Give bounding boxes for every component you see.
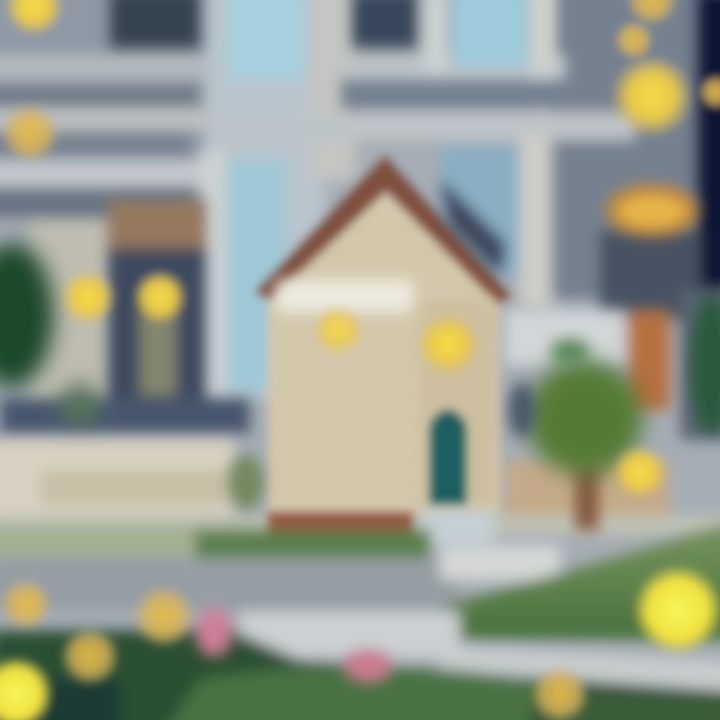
wall brick mottling (275, 230, 450, 490)
wall shading (420, 300, 495, 510)
top windows (110, 0, 554, 78)
house wall (268, 190, 500, 515)
right side lower wall and orange panel (505, 295, 720, 525)
dark right edge (600, 0, 720, 440)
left doorway with arch (0, 200, 250, 434)
house roof (255, 155, 512, 304)
shrub by the wall (228, 454, 264, 510)
door step (420, 510, 495, 545)
right tree (508, 338, 643, 530)
pink flowers (196, 608, 392, 682)
left tree (0, 243, 100, 427)
brick foundation (268, 512, 413, 544)
lawn and paths (0, 520, 720, 720)
house (255, 155, 512, 545)
large orange oval sign (606, 184, 698, 236)
house door (430, 410, 466, 505)
roof shadow (440, 180, 505, 275)
white eave band (276, 280, 414, 312)
low garden wall on the left (0, 440, 720, 535)
